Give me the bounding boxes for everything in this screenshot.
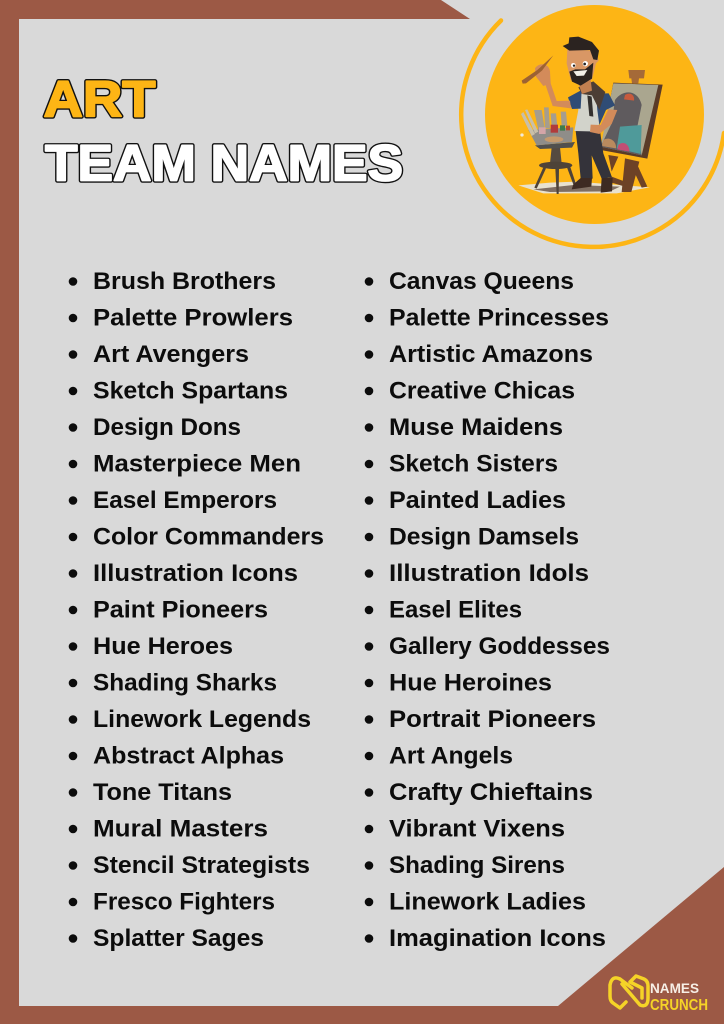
- illustration: painter in circle: [461, 5, 724, 247]
- hand and brush: [535, 64, 551, 86]
- right list of team names: Creative Chicas: [389, 378, 575, 404]
- right list of team names: Muse Maidens: [389, 414, 563, 441]
- right list of team names: Illustration Idols: [389, 560, 589, 587]
- right list of team names: Art Angels: [389, 742, 513, 770]
- logo: names crunch: [610, 976, 708, 1014]
- right list of team names: Canvas Queens: [389, 268, 574, 295]
- bullets left: [69, 277, 77, 943]
- orange ring: [461, 20, 724, 247]
- left list of team names: Fresco Fighters: [93, 888, 275, 916]
- arms: [545, 83, 571, 108]
- right list of team names: Hue Heroines: [389, 670, 552, 696]
- heading: art: ART: [44, 70, 156, 128]
- left list of team names: Tone Titans: [93, 779, 232, 806]
- left list of team names: Illustration Icons: [93, 560, 298, 587]
- bullets right: [365, 277, 373, 943]
- logo wordmark: [650, 980, 708, 1014]
- easel: [601, 70, 663, 192]
- left list of team names: Easel Emperors: [93, 487, 277, 514]
- right list of team names: Painted Ladies: [389, 487, 566, 514]
- left list of team names: Design Dons: [93, 414, 241, 441]
- title: [44, 70, 403, 192]
- left list of team names: Mural Masters: [93, 816, 268, 842]
- right list of team names: Vibrant Vixens: [389, 816, 565, 842]
- right list of team names: [365, 268, 610, 952]
- heading: art: ART: [44, 70, 156, 128]
- right list of team names: Easel Elites: [389, 596, 522, 624]
- head: [578, 80, 592, 94]
- left list of team names: Color Commanders: [93, 524, 324, 550]
- right list of team names: Design Damsels: [389, 524, 579, 550]
- logo wordmark: NAMES: [650, 980, 699, 996]
- left list of team names: Paint Pioneers: [93, 596, 268, 624]
- logo wordmark: CRUNCH: [650, 997, 708, 1014]
- left list of team names: Linework Legends: [93, 706, 311, 733]
- heading: team names: TEAM NAMES: [45, 134, 403, 192]
- right list of team names: Shading Sirens: [389, 852, 565, 879]
- ground: [518, 182, 650, 193]
- right list of team names: Crafty Chieftains: [389, 779, 593, 806]
- left list of team names: Shading Sharks: [93, 670, 277, 696]
- painter figure: [518, 37, 663, 194]
- left list of team names: Abstract Alphas: [93, 742, 284, 770]
- palette table and stool: [520, 107, 576, 194]
- left list of team names: Sketch Spartans: [93, 378, 288, 404]
- left list of team names: Masterpiece Men: [93, 450, 301, 478]
- left list of team names: Art Avengers: [93, 341, 249, 368]
- shirt: [574, 92, 599, 132]
- left list of team names: [69, 268, 324, 952]
- right list of team names: Imagination Icons: [389, 925, 606, 952]
- heading: team names: TEAM NAMES: [45, 134, 403, 192]
- right list of team names: Gallery Goddesses: [389, 633, 610, 660]
- left list of team names: Hue Heroes: [93, 633, 233, 660]
- orange circle: [485, 5, 704, 224]
- right list of team names: Sketch Sisters: [389, 450, 558, 478]
- icon: N mark: [610, 976, 648, 1008]
- right list of team names: Artistic Amazons: [389, 341, 593, 368]
- left list of team names: Brush Brothers: [93, 268, 276, 295]
- right list of team names: Linework Ladies: [389, 888, 586, 916]
- left list of team names: Splatter Sages: [93, 925, 264, 952]
- trousers and boots: [576, 131, 612, 179]
- right list of team names: Palette Princesses: [389, 304, 609, 332]
- left list of team names: Stencil Strategists: [93, 852, 310, 879]
- left list of team names: Palette Prowlers: [93, 304, 293, 332]
- right list of team names: Portrait Pioneers: [389, 706, 596, 733]
